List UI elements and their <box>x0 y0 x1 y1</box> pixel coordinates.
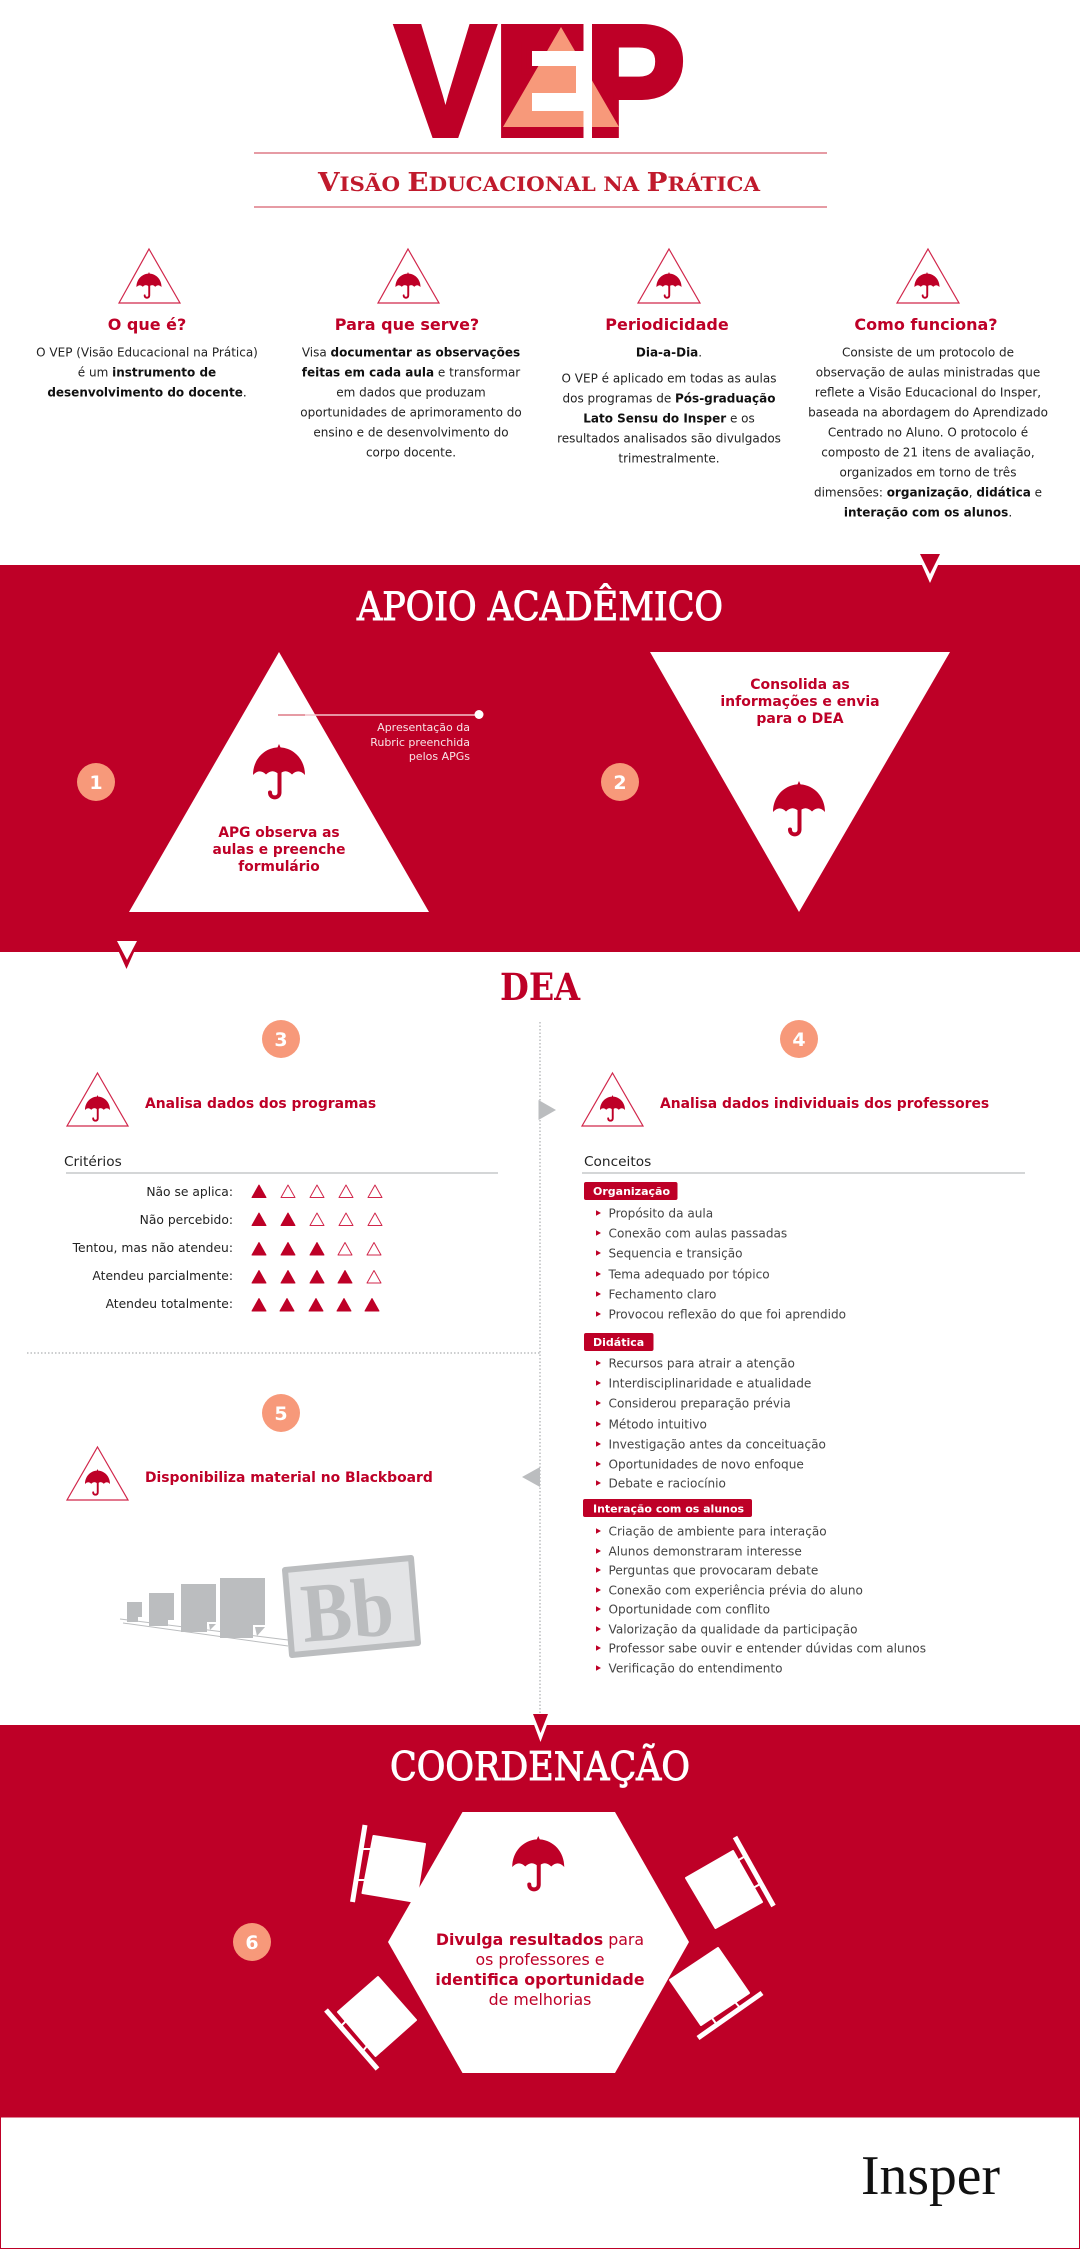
chair: bottom right <box>670 1948 762 2038</box>
hexagon: step 6: identifica oportunidade <box>435 1970 645 1989</box>
list: Interação com os alunos: Valorização da qualidade da participação <box>608 1622 858 1636</box>
number 5: 5 <box>274 1403 288 1425</box>
text block: composto de 21 itens de avaliação, <box>821 446 1035 460</box>
text block: Centrado no Aluno. O protocolo é <box>828 426 1028 440</box>
panel: Como funciona? <box>808 249 1048 520</box>
number 6: 6 <box>245 1932 259 1954</box>
list: Didática: Debate e raciocínio <box>608 1476 726 1490</box>
chair: top left <box>352 1825 425 1902</box>
triangle: step 2: Consolida as <box>750 677 850 693</box>
list: Interação com os alunos: Perguntas que provocaram debate <box>608 1564 818 1578</box>
list: Interação com os alunos: Criação de ambiente para interação <box>608 1524 827 1538</box>
heading: Analisa dados individuais dos professores <box>660 1096 989 1112</box>
arrow: to step 4 <box>538 1100 556 1120</box>
text block: O VEP é aplicado em todas as aulas <box>562 372 776 386</box>
text block: organizados em torno de três <box>840 466 1016 480</box>
number 1 <box>77 763 115 801</box>
list: Interação com os alunos: Professor sabe ouvir e entender dúvidas com alunos <box>608 1642 926 1656</box>
text block: O VEP (Visão Educacional na Prática) <box>36 346 258 360</box>
heading: COORDENAÇÃO <box>390 1743 690 1790</box>
list: Didática: Interdisciplinaridade e atualidade <box>608 1376 811 1390</box>
text block: oportunidades de aprimoramento do <box>300 406 522 420</box>
logo: VEP <box>396 0 685 169</box>
list: Didática: Oportunidades de novo enfoque <box>608 1458 804 1472</box>
text block: observação de aulas ministradas que <box>816 366 1040 380</box>
panel: step 5 <box>67 1394 433 1661</box>
arrow: into DEA <box>114 941 139 969</box>
row: Atendeu totalmente: Atendeu totalmente: <box>106 1297 233 1311</box>
icon: umbrella triangle <box>897 249 959 303</box>
panel: Coordenação <box>0 1725 1080 2117</box>
triangle: step 1: aulas e preenche <box>213 842 345 858</box>
icon: umbrella triangle <box>119 249 180 303</box>
subheading: Critérios <box>64 1154 122 1170</box>
text block: dimensões: organização, didática e <box>814 486 1042 500</box>
arrow: to step 5 <box>522 1467 540 1487</box>
logo: Insper: Insper <box>861 2145 1000 2207</box>
icon: umbrella triangle <box>638 249 700 303</box>
hexagon: step 6: de melhorias <box>489 1990 591 2009</box>
hexagon: step 6: Divulga resultados para <box>436 1930 644 1949</box>
list: Interação com os alunos <box>596 1524 926 1676</box>
text block: é um instrumento de <box>78 366 216 380</box>
text block: corpo docente. <box>366 446 456 460</box>
list: Organização: Tema adequado por tópico <box>608 1268 770 1282</box>
number 3 <box>262 1020 300 1058</box>
row: Não se aplica: Não se aplica: <box>146 1185 233 1199</box>
list: Didática: Método intuitivo <box>608 1418 707 1432</box>
text block: Consiste de um protocolo de <box>842 346 1014 360</box>
callout: Rubric: Apresentação da <box>377 721 470 734</box>
text block: Visa documentar as observações <box>302 346 520 360</box>
triangle: step 2 <box>650 652 950 912</box>
heading: Disponibiliza material no Blackboard <box>145 1470 433 1486</box>
list: Interação com os alunos: Verificação do entendimento <box>608 1662 783 1676</box>
icon: umbrella triangle <box>582 1073 643 1126</box>
heading: Como funciona? <box>854 315 998 334</box>
panel: O que é? <box>36 249 258 400</box>
text block: dos programas de Pós-graduação <box>563 392 775 406</box>
arrow: into Coordenação <box>530 1714 551 1742</box>
list: Interação com os alunos: Alunos demonstraram interesse <box>608 1544 802 1558</box>
triangle: step 2: para o DEA <box>756 711 844 727</box>
row: Atendeu totalmente <box>106 1297 379 1311</box>
panel: step 4 <box>582 1020 1025 1676</box>
text block: desenvolvimento do docente. <box>47 386 247 400</box>
list: Organização <box>596 1206 846 1322</box>
badge: Didática <box>584 1333 654 1351</box>
heading: Analisa dados dos programas <box>145 1096 376 1112</box>
icon: umbrella triangle <box>378 249 439 303</box>
text block: trimestralmente. <box>618 452 720 466</box>
row: Não percebido <box>140 1213 382 1227</box>
list: Didática: Investigação antes da conceituação <box>608 1438 826 1452</box>
illustration: documents moving to Blackboard <box>120 1558 418 1661</box>
triangle: step 1: APG observa as <box>218 825 340 841</box>
chair: bottom left <box>326 1977 416 2069</box>
badge: Organização: Organização <box>593 1185 670 1198</box>
text block: reflete a Visão Educacional do Insper, <box>815 386 1041 400</box>
row: Não se aplica <box>146 1185 382 1199</box>
number 5 <box>262 1394 300 1432</box>
chair: top right <box>686 1837 774 1928</box>
triangle: step 2: informações e envia <box>720 694 880 710</box>
row: Tentou <box>72 1241 381 1255</box>
arrow: into Apoio <box>917 554 943 583</box>
list: Didática: Considerou preparação prévia <box>608 1396 791 1410</box>
text block: em dados que produzam <box>336 386 486 400</box>
illustration: documents moving to Blackboard: Bb <box>298 1560 397 1661</box>
subheading: Conceitos <box>584 1154 651 1170</box>
badge: Organização <box>584 1182 678 1200</box>
callout: Rubric: Rubric preenchida <box>370 736 470 749</box>
text block: feitas em cada aula e transformar <box>302 366 520 380</box>
list: Organização: Propósito da aula <box>608 1206 713 1220</box>
row: Tentou: Tentou, mas não atendeu: <box>72 1241 233 1255</box>
text block: resultados analisados são divulgados <box>557 432 781 446</box>
callout: Rubric: pelos APGs <box>409 750 470 763</box>
number 6 <box>233 1923 271 1961</box>
number 1: 1 <box>89 772 103 794</box>
number 3: 3 <box>274 1029 288 1051</box>
number 2 <box>601 763 639 801</box>
title: Visão Educacional na Prática: VISÃO EDUCACIONAL NA PRÁTICA <box>317 168 761 198</box>
number 4 <box>780 1020 818 1058</box>
list: Interação com os alunos: Conexão com experiência prévia do aluno <box>608 1584 863 1598</box>
badge: Didática: Didática <box>593 1336 644 1349</box>
panel: Para que serve? <box>300 249 522 460</box>
triangle: step 1 <box>129 652 429 912</box>
panel: Periodicidade <box>557 249 781 466</box>
row: Não percebido: Não percebido: <box>140 1213 233 1227</box>
criteria rating chart <box>72 1185 382 1311</box>
text block: interação com os alunos. <box>844 506 1012 520</box>
text block: ensino e de desenvolvimento do <box>313 426 509 440</box>
heading: O que é? <box>108 315 186 334</box>
list: Didática <box>596 1356 826 1490</box>
panel: Apoio Acadêmico <box>0 565 1080 952</box>
text block: Dia-a-Dia. <box>636 346 702 360</box>
icon: umbrella triangle <box>67 1447 128 1500</box>
icon: umbrella triangle <box>67 1073 128 1126</box>
number 2: 2 <box>613 772 627 794</box>
heading: DEA: DEA <box>500 965 581 1009</box>
callout: Rubric <box>278 710 484 763</box>
footer <box>0 2117 1080 2248</box>
hexagon: step 6 <box>388 1812 689 2073</box>
row: Atendeu parcialmente <box>92 1269 381 1283</box>
list: Interação com os alunos: Oportunidade com conflito <box>608 1602 770 1616</box>
triangle: step 1: formulário <box>238 859 320 875</box>
list: Organização: Provocou reflexão do que foi aprendido <box>608 1308 846 1322</box>
list: Organização: Sequencia e transição <box>608 1246 743 1260</box>
heading: Para que serve? <box>335 315 479 334</box>
hexagon: step 6: os professores e <box>476 1950 604 1969</box>
badge: Interação com os alunos <box>583 1499 752 1517</box>
heading: APOIO ACADÊMICO <box>356 583 723 630</box>
list: Organização: Fechamento claro <box>608 1288 716 1302</box>
text block: Lato Sensu do Insper e os <box>583 412 755 426</box>
text block: baseada na abordagem do Aprendizado <box>808 406 1048 420</box>
list: Didática: Recursos para atrair a atenção <box>608 1356 795 1370</box>
badge: Interação com os alunos: Interação com os alunos <box>593 1502 745 1516</box>
list: Organização: Conexão com aulas passadas <box>608 1226 787 1240</box>
number 4: 4 <box>792 1029 806 1051</box>
row: Atendeu parcialmente: Atendeu parcialmente: <box>92 1269 233 1283</box>
heading: Periodicidade <box>605 315 729 334</box>
panel: step 3 <box>64 1020 498 1311</box>
